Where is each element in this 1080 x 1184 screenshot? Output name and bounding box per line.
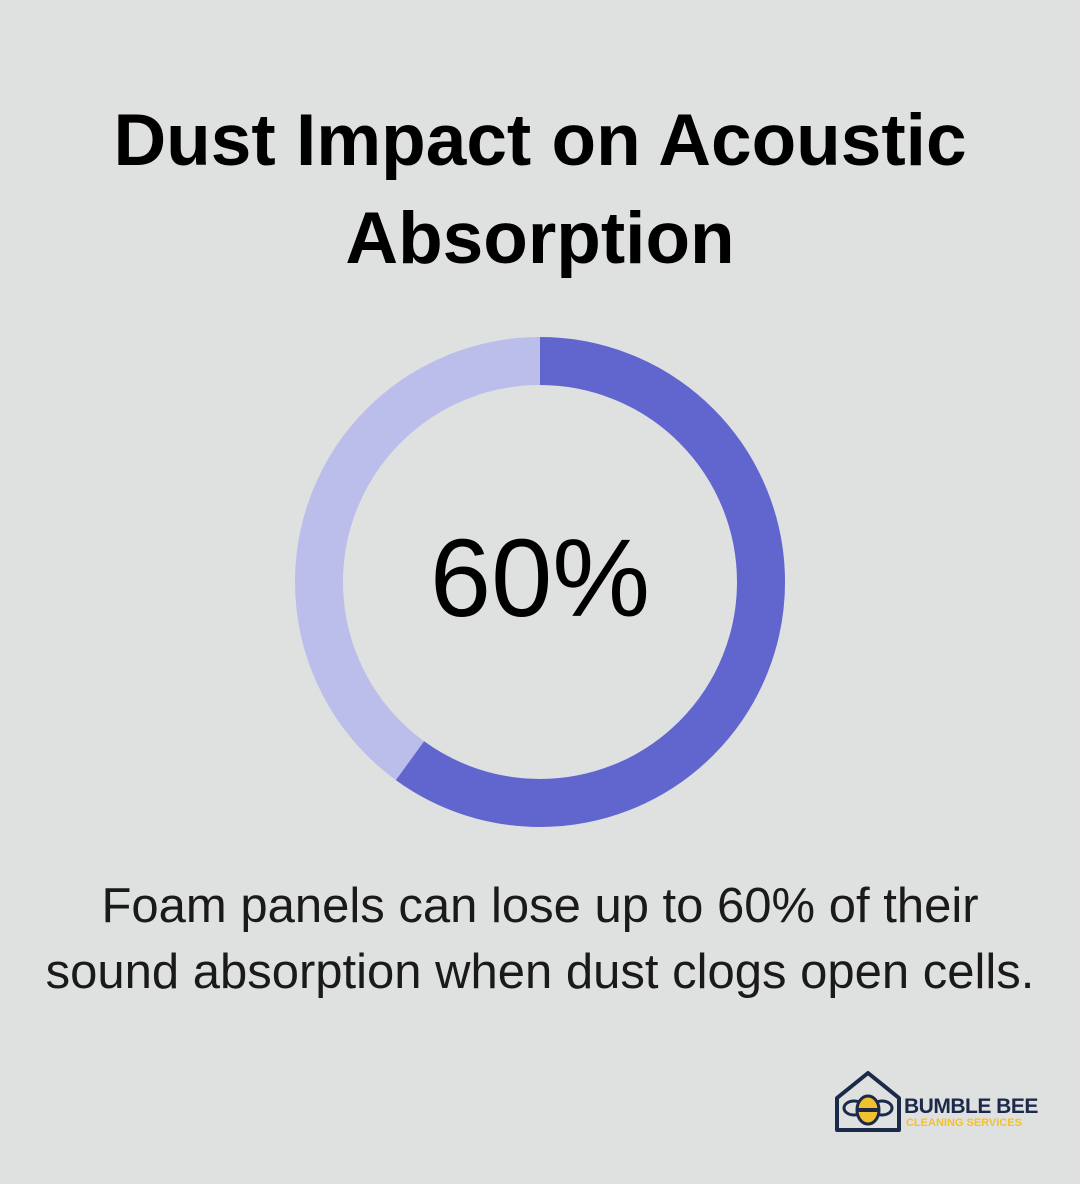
title: Absorption xyxy=(345,198,735,279)
caption: Foam panels can lose up to 60% of their xyxy=(101,879,979,933)
icon: house with bee xyxy=(835,1070,901,1132)
title: Dust Impact on Acoustic xyxy=(113,100,967,181)
ring value segment 60% xyxy=(319,361,761,803)
title xyxy=(113,100,967,279)
ring background segment xyxy=(319,361,761,803)
logo: CLEANING SERVICES xyxy=(906,1117,1022,1129)
logo xyxy=(835,1070,1038,1132)
center value: 60% xyxy=(430,517,650,640)
caption xyxy=(46,879,1034,999)
caption: sound absorption when dust clogs open cells. xyxy=(46,945,1034,999)
brand text: BUMBLE BEE xyxy=(904,1095,1038,1118)
